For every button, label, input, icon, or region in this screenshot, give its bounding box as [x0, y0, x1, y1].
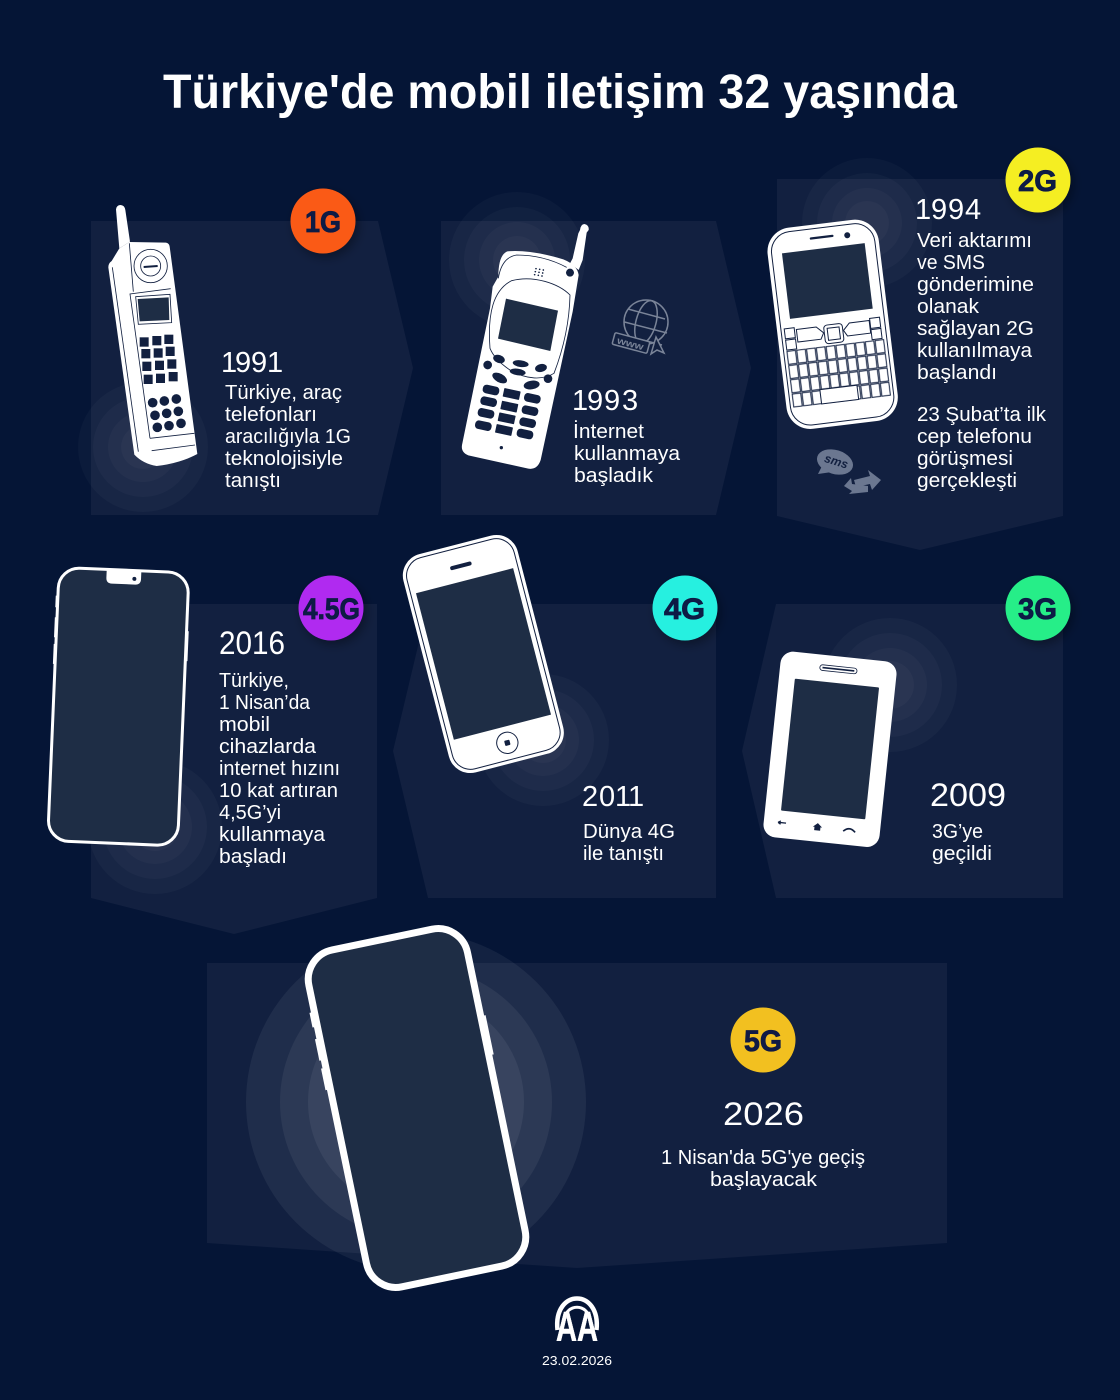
panel: 1994 2G — [765, 148, 1070, 550]
text: 2026 description — [661, 1146, 865, 1191]
text: 1994 description: 23 Şubat’ta ilk — [917, 403, 1047, 426]
text: 1994 description: başlandı — [917, 361, 997, 384]
date: 23.02.2026 — [542, 1353, 612, 1368]
text: 2016 description: Türkiye, — [219, 669, 289, 692]
text: 2011 description: ile tanıştı — [583, 842, 664, 865]
icon: globe www: www — [614, 335, 645, 353]
panel: 2011 4G — [393, 530, 718, 898]
badge: 4.5G: 4.5G — [303, 593, 360, 626]
text: 1991 description: Türkiye, araç — [225, 381, 342, 404]
text: 2016 description — [219, 669, 340, 868]
text: 1993 description: İnternet — [573, 420, 644, 443]
text: 1991 description: telefonları — [225, 403, 317, 426]
text: 1994 description: gerçekleşti — [917, 469, 1017, 492]
text: 1994 description: olanak — [917, 295, 980, 318]
text: 2016 description: 10 kat artıran — [219, 779, 338, 802]
text: 1994 description: sağlayan 2G — [917, 317, 1034, 340]
year: 1991: 1991 — [221, 347, 283, 379]
logo: AA — [556, 1298, 598, 1350]
year: 2026: 2026 — [723, 1096, 804, 1132]
icon: sms bubble and arrows — [814, 445, 881, 494]
text: 2016 description: mobil — [219, 713, 270, 736]
title: Türkiye'de mobil iletişim 32 yaşında — [163, 66, 957, 119]
icon: qwerty phone — [765, 217, 901, 432]
text: 1994 description: kullanılmaya — [917, 339, 1033, 362]
badge: 5G — [730, 1008, 796, 1072]
signal circles — [246, 932, 586, 1272]
icon: globe www — [612, 298, 668, 354]
text: 2016 description: 4,5G’yi — [219, 801, 281, 824]
text: 2016 description: kullanmaya — [219, 823, 326, 846]
text: 1994 description: görüşmesi — [917, 447, 1013, 470]
badge: 3G — [1006, 576, 1070, 640]
signal circles — [78, 382, 208, 512]
text: 2016 description: cihazlarda — [219, 735, 317, 758]
signal circles — [823, 618, 957, 752]
badge: 1G — [290, 188, 356, 254]
signal circles — [802, 158, 932, 288]
text: 2011 description: Dünya 4G — [583, 820, 675, 843]
panel: 2026 5G — [207, 922, 947, 1294]
text: 2009 description: 3G’ye — [932, 820, 983, 843]
badge: 2G: 2G — [1018, 165, 1057, 198]
year: 2011: 2011 — [582, 781, 644, 813]
text: 2016 description: 1 Nisan’da — [219, 691, 311, 714]
signal circles — [88, 760, 222, 894]
badge: 3G: 3G — [1018, 593, 1057, 626]
year: 1994: 1994 — [915, 194, 981, 226]
signal circles — [449, 192, 585, 328]
text: 1994 description — [917, 229, 1047, 492]
panel: 1991 1G — [78, 188, 413, 515]
text: 2011 description — [583, 820, 675, 865]
icon: touchscreen phone — [762, 650, 898, 848]
icon: smartphone with home button — [398, 530, 569, 778]
text: 1991 description: teknolojisiyle — [225, 447, 343, 470]
text: 2016 description: internet hızını — [219, 757, 340, 780]
text: 1991 description: aracılığıyla 1G — [225, 425, 351, 448]
icon: candybar phone — [462, 224, 589, 469]
text: 2016 description: başladı — [219, 845, 287, 868]
text: 1991 description — [225, 381, 351, 492]
icon: sms bubble and arrows: sms — [823, 451, 850, 472]
badge: 4G — [652, 576, 718, 640]
text: 1994 description: Veri aktarımı — [917, 229, 1032, 252]
text: 1993 description — [573, 420, 681, 487]
badge: 4G: 4G — [664, 593, 705, 626]
text: 1991 description: tanıştı — [225, 469, 281, 492]
logo: AA: AA — [556, 1303, 598, 1350]
text: 1993 description: başladık — [574, 464, 654, 487]
panel: 2016 4.5G — [46, 567, 377, 934]
badge: 5G: 5G — [744, 1025, 782, 1058]
text: 2009 description — [932, 820, 992, 865]
year: 1993: 1993 — [572, 385, 638, 417]
text: 1994 description: cep telefonu — [917, 425, 1032, 448]
text: 2026 description: başlayacak — [710, 1168, 818, 1191]
year: 2016: 2016 — [219, 625, 285, 661]
badge: 4.5G — [298, 576, 364, 640]
text: 2009 description: geçildi — [932, 842, 992, 865]
badge: 1G: 1G — [305, 206, 341, 239]
icon: large smartphone — [299, 922, 535, 1294]
text: 1994 description: gönderimine — [917, 273, 1034, 296]
text: 1994 description: ve SMS — [917, 251, 985, 274]
text: 2026 description: 1 Nisan'da 5G'ye geçiş — [661, 1146, 865, 1169]
badge: 2G — [1006, 148, 1070, 212]
text: 1993 description: kullanmaya — [574, 442, 681, 465]
year: 2009: 2009 — [930, 777, 1006, 813]
icon: notched smartphone — [46, 567, 190, 846]
panel: 1993 internet — [441, 192, 751, 515]
icon: brick car phone — [108, 205, 197, 466]
panel: 2009 3G — [742, 576, 1070, 898]
signal circles — [477, 674, 609, 806]
